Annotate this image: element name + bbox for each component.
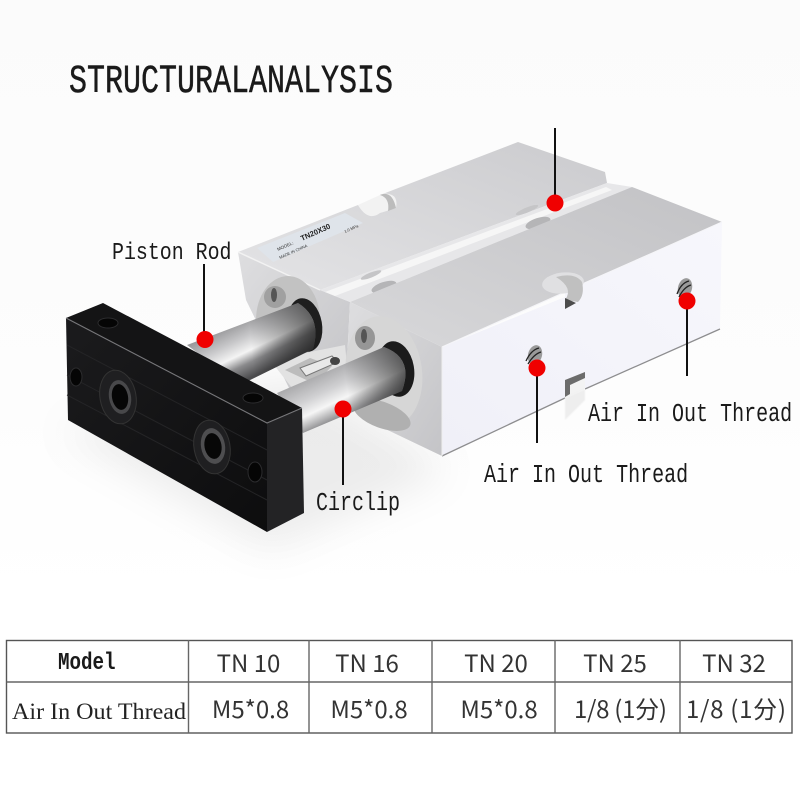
specification table <box>6 640 792 733</box>
plate socket left <box>96 367 140 427</box>
thread row: Air In Out Thread <box>12 699 187 724</box>
air port left <box>526 344 544 366</box>
front block <box>345 187 722 456</box>
callout: circlip: Circlip <box>316 489 400 518</box>
rear bushing <box>256 276 326 364</box>
callout: air in out thread front <box>484 360 688 490</box>
callout: circlip <box>316 400 400 518</box>
soft shadows <box>60 380 450 550</box>
thread row: 1/8 (1分) <box>574 690 667 725</box>
nameplate: 1.0 MPa <box>343 223 360 234</box>
plate bolt holes <box>70 318 263 482</box>
front bushing <box>339 311 429 437</box>
front rod <box>277 347 405 433</box>
thread row: M5*0.8 <box>212 690 289 725</box>
air port right <box>676 277 694 299</box>
rear block <box>238 142 607 400</box>
callout: air in out thread rear <box>588 292 792 429</box>
thread row: 1/8 (1分) <box>686 690 786 725</box>
rear rod <box>187 303 315 385</box>
callout: air in out thread rear: Air In Out Thread <box>588 400 792 429</box>
thread row: M5*0.8 <box>330 690 408 725</box>
thread row: M5*0.8 <box>460 690 538 725</box>
nameplate: TN20X30 <box>299 222 332 243</box>
header row <box>58 644 766 679</box>
header row: TN 32 <box>702 644 766 679</box>
mounting hole <box>541 270 585 296</box>
callout: piston rod <box>112 239 232 348</box>
header row: TN 16 <box>335 644 399 679</box>
callout: air in out thread front: Air In Out Thread <box>484 461 688 490</box>
cylinder product illustration <box>66 142 722 532</box>
lower notch <box>565 372 585 398</box>
black mounting plate <box>66 303 304 532</box>
thread row <box>12 690 786 725</box>
nameplate: MODEL: <box>276 240 294 252</box>
header row: TN 25 <box>583 644 647 679</box>
nameplate: MADE IN CHINA <box>278 243 308 260</box>
header row: TN 10 <box>217 644 280 679</box>
inner clip and shadow area <box>270 345 350 398</box>
callout: top unlabeled <box>546 128 564 212</box>
plate socket right <box>190 417 234 477</box>
header row: Model <box>58 649 116 677</box>
groove between blocks <box>320 183 632 302</box>
nameplate <box>257 213 363 262</box>
header row: TN 20 <box>464 644 528 679</box>
callout: piston rod: Piston Rod <box>112 239 232 267</box>
title: STRUCTURALANALYSIS <box>69 59 393 104</box>
